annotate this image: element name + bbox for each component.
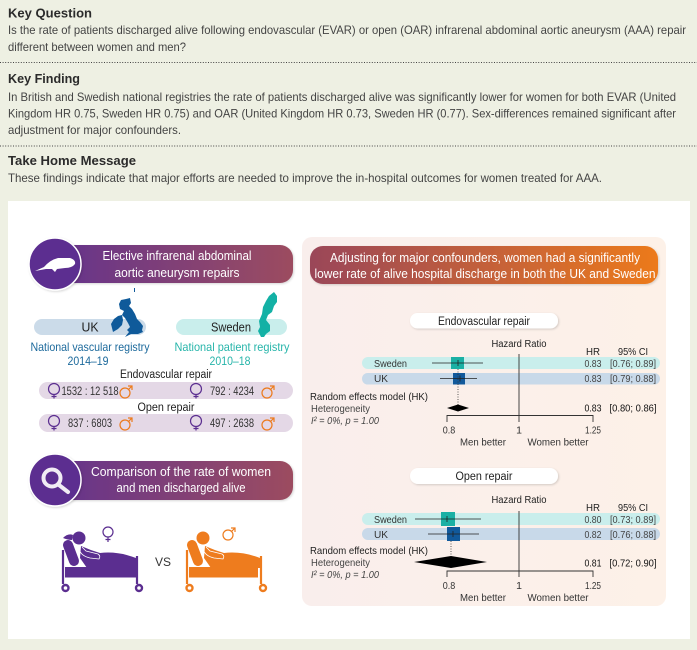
forest plot: endovascular repair: Women better — [528, 436, 589, 448]
row: Sweden — [362, 357, 660, 370]
panel: white graphical abstract card — [8, 201, 690, 639]
banner: adjusted result: lower rate of alive hospital discharge in both the UK and Sweden — [314, 267, 656, 281]
row: UK — [362, 373, 660, 385]
text: comparison label: and men discharged alive — [116, 481, 246, 495]
row: UK: 0.83 — [584, 373, 602, 385]
label: versus: VS — [155, 555, 171, 569]
forest plot: endovascular repair: HR — [586, 347, 600, 358]
counts: endovascular repair: 1532 : 12 518 — [62, 386, 118, 398]
axis — [447, 354, 593, 422]
text: model labels: I² = 0%, p = 1.00 — [311, 415, 379, 427]
row: UK: 0.82 — [584, 529, 602, 541]
summary diamond — [447, 404, 469, 412]
icon: Sweden map — [258, 292, 277, 337]
forest plot: open repair: Hazard Ratio — [492, 495, 547, 506]
text: Sweden registry — [174, 340, 290, 368]
panel: right forest plots — [302, 237, 666, 606]
label: endovascular repair: Endovascular repair — [438, 316, 530, 328]
text: comparison label — [91, 465, 271, 495]
forest plot: endovascular repair: 1 — [516, 424, 522, 436]
label: Sweden: Sweden — [211, 320, 251, 334]
forest plot: open repair: Men better — [460, 592, 506, 604]
text: key finding body — [8, 90, 676, 137]
forest plot: endovascular repair — [310, 313, 660, 448]
counts: open repair: Open repair — [138, 402, 195, 414]
forest plot: endovascular repair: 0.83 — [584, 402, 602, 414]
text: banner label: aortic aneurysm repairs — [114, 266, 240, 280]
label: UK: UK — [82, 320, 99, 334]
forest plot: open repair: 95% CI — [618, 503, 648, 514]
text: model labels: Random effects model (HK) — [310, 545, 428, 557]
summary diamond — [414, 556, 487, 568]
icon: male symbol — [223, 528, 235, 540]
banner: adjusted result: Adjusting for major confounders, women had a significantly — [330, 251, 641, 265]
axis — [447, 511, 593, 577]
counts: open repair: 497 : 2638 — [210, 418, 254, 430]
text: UK registry — [30, 340, 150, 368]
forest plot: open repair: Women better — [528, 592, 589, 604]
label: endovascular repair — [410, 313, 558, 328]
section: key question — [8, 6, 686, 54]
text: model labels: I² = 0%, p = 1.00 — [311, 569, 379, 581]
counts: open repair: 837 : 6803 — [68, 418, 112, 430]
forest plot: endovascular repair: Hazard Ratio — [492, 339, 547, 350]
row: Sweden — [362, 512, 660, 526]
panel: left study design — [29, 238, 293, 591]
forest plot: open repair: 1.25 — [585, 580, 601, 592]
text: model labels: Heterogeneity — [311, 557, 371, 569]
text: key question body: different between women and men? — [8, 40, 186, 54]
text: UK registry: National vascular registry — [30, 340, 150, 354]
text: key question body — [8, 23, 686, 54]
text: banner label — [102, 249, 252, 280]
row: UK: UK — [374, 529, 388, 541]
row: UK: [0.76; 0.88] — [610, 529, 656, 541]
row: Sweden: Sweden — [374, 514, 407, 526]
banner: comparison — [29, 454, 293, 506]
registry: UK — [30, 288, 150, 368]
icon: female symbol — [103, 527, 113, 542]
text: Sweden registry: National patient registry — [174, 340, 290, 354]
heading: key question: Key Question — [8, 6, 92, 20]
forest plot: open repair: 0.81 — [584, 558, 602, 570]
row: Sweden: 0.80 — [584, 514, 602, 526]
icon: UK map — [111, 288, 143, 337]
text: key finding body: adjustment for major confounders. — [8, 123, 181, 137]
forest plot: open repair: HR — [586, 503, 600, 514]
icon: magnifying glass — [44, 470, 68, 492]
forest plot: open repair: 0.8 — [443, 580, 455, 592]
row: UK: [0.79; 0.88] — [610, 373, 656, 385]
registry: Sweden — [174, 292, 290, 368]
text: model labels — [310, 545, 428, 581]
banner: adjusted result — [310, 246, 658, 284]
section: take home message — [8, 153, 602, 185]
forest plot: endovascular repair: 1.25 — [585, 424, 601, 436]
forest plot: endovascular repair: 95% CI — [618, 347, 648, 358]
text: model labels: Random effects model (HK) — [310, 391, 428, 403]
section: key finding — [8, 71, 676, 137]
text: banner label: Elective infrarenal abdominal — [102, 249, 252, 263]
heading: key finding: Key Finding — [8, 71, 80, 86]
counts: endovascular repair: 792 : 4234 — [210, 386, 254, 398]
icon: man in hospital bed — [186, 532, 266, 591]
row: UK: UK — [374, 373, 388, 385]
text: model labels: Heterogeneity — [311, 403, 371, 415]
counts: endovascular repair: Endovascular repair — [120, 369, 212, 381]
row: Sweden: [0.73; 0.89] — [610, 514, 656, 526]
forest plot: open repair: [0.72; 0.90] — [610, 558, 657, 570]
icon: woman in hospital bed — [62, 532, 142, 591]
label: open repair — [410, 468, 558, 484]
heading: take home message: Take Home Message — [8, 153, 136, 168]
text: take home body: These findings indicate that major efforts are needed to improve the in-hospital outcomes for women treated for AAA. — [8, 171, 602, 185]
counts: endovascular repair — [39, 369, 293, 399]
forest plot: open repair — [310, 468, 660, 604]
row: Sweden: 0.83 — [584, 358, 602, 370]
forest plot: endovascular repair: 0.8 — [443, 424, 455, 436]
forest plot: endovascular repair: [0.80; 0.86] — [610, 402, 657, 414]
text: model labels — [310, 391, 428, 427]
text: Sweden registry: 2010–18 — [210, 354, 251, 368]
row: Sweden: Sweden — [374, 358, 407, 370]
forest plot: endovascular repair: Men better — [460, 436, 506, 448]
text: UK registry: 2014–19 — [68, 354, 109, 368]
banner: elective repairs — [29, 238, 293, 290]
text: comparison label: Comparison of the rate of women — [91, 465, 271, 479]
forest plot: open repair: 1 — [516, 580, 522, 592]
icon: hand pressing on abdomen — [35, 258, 75, 272]
counts: open repair — [39, 402, 293, 432]
label: open repair: Open repair — [456, 471, 513, 483]
row: UK — [362, 527, 660, 541]
row: Sweden: [0.76; 0.89] — [610, 358, 656, 370]
